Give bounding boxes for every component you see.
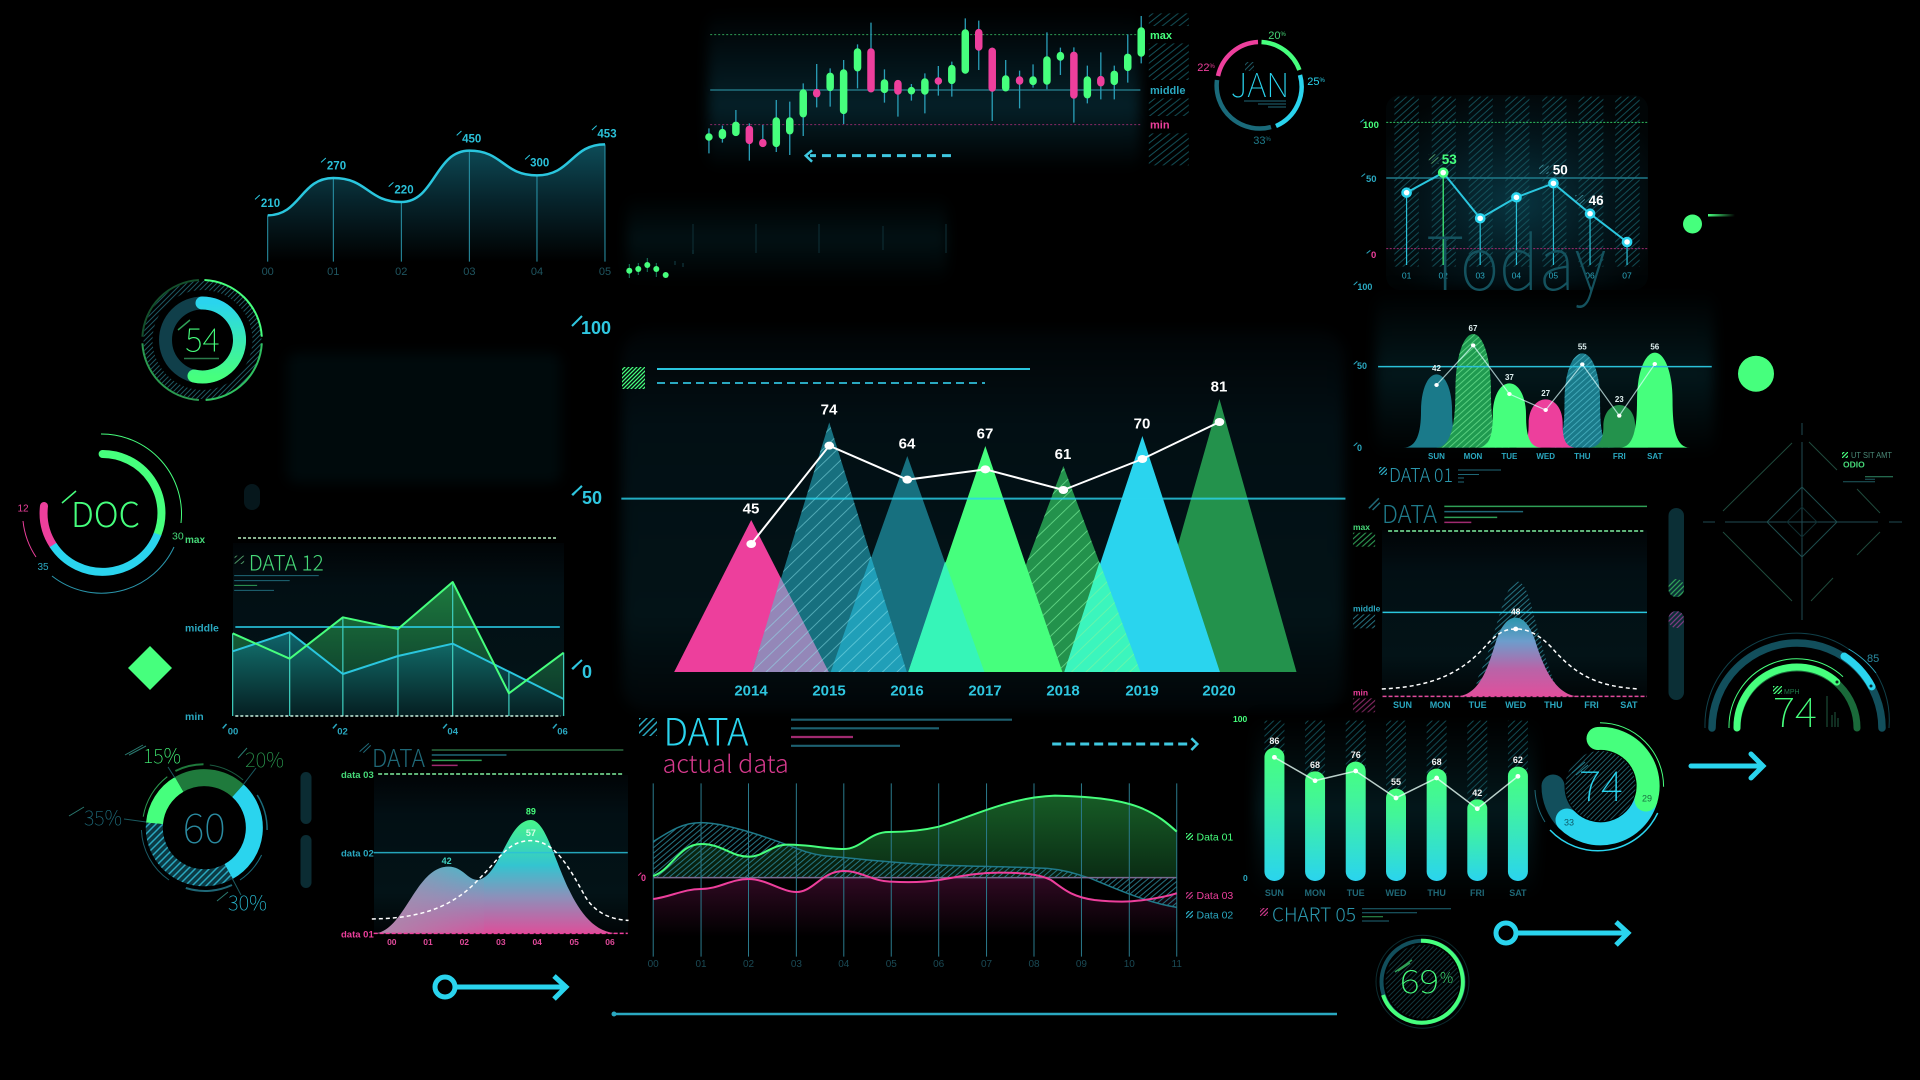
x axis labels: 04 (1512, 270, 1521, 280)
peak values (442, 806, 536, 866)
year labels: 2015 (812, 682, 846, 700)
x axis labels: 00 (648, 959, 659, 970)
value labels: 55 (1578, 342, 1587, 352)
faint panel behind left area (287, 353, 561, 483)
panel: big DATA multi-series chart (638, 702, 1233, 970)
x axis labels: 03 (496, 937, 506, 947)
x axis labels: 08 (1028, 959, 1040, 970)
value labels: 37 (1505, 373, 1514, 382)
day labels: SAT (1509, 888, 1527, 898)
x axis labels: 05 (886, 959, 897, 970)
panel: bar chart (1233, 714, 1536, 898)
legend (1186, 832, 1233, 922)
value labels: 70 (1134, 416, 1150, 432)
heading: DATA 01: DATA 01 (1389, 461, 1453, 488)
x axis labels: 03 (463, 266, 476, 278)
gauge value: 54 (185, 314, 220, 362)
radar caption: UT SIT AMT (1851, 450, 1892, 460)
peak values: 89 (526, 806, 536, 816)
y axis labels: 100 (1233, 714, 1247, 724)
year labels: 2016 (890, 682, 924, 700)
label: min: min (1150, 120, 1170, 132)
value labels: 42 (1472, 788, 1482, 798)
candlestick marks and guide lines (709, 13, 1189, 165)
panel: weekly humps chart (1354, 282, 1714, 461)
x axis labels: 04 (838, 959, 850, 970)
gauge value: 74 (1579, 753, 1623, 814)
gauge: JAN ring (1197, 30, 1325, 147)
data labels: 270 (327, 160, 346, 172)
x axis labels (387, 937, 615, 947)
value labels: 27 (1541, 389, 1551, 398)
year labels: 2020 (1202, 682, 1236, 700)
day labels: MON (1430, 700, 1451, 710)
value labels: 67 (977, 426, 993, 442)
side labels (341, 770, 374, 940)
heading: CHART 05: CHART 05 (1272, 901, 1356, 928)
panel: main triangle chart (572, 316, 1345, 712)
day labels: MON (1304, 888, 1326, 898)
side labels: data 02 (341, 848, 374, 860)
day labels: WED (1386, 888, 1407, 898)
y axis labels: 0 (1371, 250, 1376, 261)
gauge: 54 (142, 280, 262, 400)
data labels: 210 (261, 198, 280, 210)
day labels: TUE (1469, 700, 1487, 710)
heading DATA: DATA (664, 702, 749, 757)
ghost word: Today: Today (1426, 205, 1606, 312)
day labels: TUE (1347, 888, 1365, 898)
side labels (1353, 522, 1381, 698)
share 30%: 30% (228, 887, 267, 916)
day labels: SUN (1428, 452, 1445, 461)
subheading: actual data (663, 745, 789, 780)
gauge: 74 ring (1535, 723, 1664, 851)
x axis labels: 01 (1402, 270, 1412, 280)
legend: Data 01 (1196, 832, 1233, 844)
day labels: FRI (1470, 888, 1485, 898)
point values: 50 (1553, 162, 1568, 178)
radar caption (1842, 450, 1893, 482)
gauge: 69 percent (1376, 935, 1469, 1028)
value labels: 45 (743, 500, 759, 518)
plot (360, 743, 629, 933)
gauge: DOC (17, 434, 205, 593)
value 33%: % (1265, 137, 1271, 143)
y axis labels (1233, 714, 1248, 883)
side labels: max (1353, 522, 1370, 532)
day labels (1428, 452, 1663, 461)
x axis labels: 05 (1549, 270, 1558, 280)
year labels: 2017 (968, 682, 1002, 700)
day labels: SAT (1647, 452, 1663, 461)
data labels: 453 (597, 128, 617, 140)
chart title: DATA 12 (249, 548, 324, 578)
y axis labels: 100 (1357, 282, 1372, 292)
value labels: 86 (1269, 736, 1279, 746)
small pill (244, 484, 260, 510)
x axis labels: 02 (1438, 270, 1448, 280)
y axis labels: 0 (1243, 873, 1248, 883)
value labels (1432, 324, 1660, 404)
value labels: 81 (1211, 378, 1227, 396)
label min: min (185, 711, 204, 723)
donut: 60 (69, 740, 284, 916)
arrow: right (1691, 754, 1763, 778)
x axis labels: 06 (557, 726, 568, 738)
x axis labels: 07 (981, 959, 992, 970)
value 25%: % (1319, 78, 1325, 84)
y axis labels (1357, 282, 1372, 453)
day labels: FRI (1584, 700, 1599, 710)
x axis labels: 07 (1622, 270, 1632, 280)
data labels (261, 128, 617, 210)
y axis labels: 0 (582, 662, 592, 682)
icon: small green dot with dash (1683, 214, 1735, 234)
x axis labels: 03 (1475, 270, 1485, 280)
day labels: FRI (1613, 452, 1626, 461)
y axis labels: 50 (1357, 361, 1367, 371)
label: middle: middle (1150, 85, 1185, 97)
value labels: 67 (1469, 324, 1478, 333)
x axis labels: 02 (395, 266, 407, 278)
value 85: 85 (1867, 653, 1879, 665)
day labels: SUN (1393, 700, 1412, 710)
x axis labels: 04 (532, 937, 542, 947)
legend: Data 02 (1196, 910, 1233, 922)
x axis labels: 02 (743, 959, 754, 970)
arrow: circle to right, right (1496, 922, 1628, 945)
y axis labels: 100 (581, 318, 611, 338)
x axis labels (1402, 270, 1632, 280)
zero label: 0 (641, 873, 646, 883)
share 20%: 20% (245, 744, 284, 773)
value 30: 30 (172, 530, 184, 542)
value 33%: 33 (1253, 135, 1265, 147)
header lines and hatch (622, 367, 1030, 389)
value 22%: % (1209, 64, 1215, 70)
day labels: SUN (1265, 888, 1284, 898)
bottom timeline line (612, 1012, 1337, 1016)
value labels: 61 (1055, 446, 1071, 463)
day labels: WED (1536, 452, 1555, 461)
speed value: 74 (1773, 679, 1817, 739)
side labels: data 03 (341, 770, 374, 781)
radar caption: ODIO (1843, 460, 1865, 470)
y axis labels: 100 (1363, 120, 1379, 131)
x axis labels: 02 (460, 937, 469, 947)
chart series (223, 486, 582, 728)
panel: DATA 12 line chart (185, 486, 582, 738)
bars (1264, 721, 1528, 881)
chart title: DATA (372, 739, 425, 775)
value labels (1269, 736, 1523, 798)
side labels: min (1353, 688, 1368, 698)
plot (1360, 97, 1648, 267)
value labels: 42 (1432, 364, 1441, 373)
x axis labels: 09 (1076, 959, 1087, 970)
label max: max (185, 535, 205, 546)
plot (1353, 498, 1647, 712)
value labels: 56 (1650, 342, 1660, 352)
day labels (1393, 700, 1638, 710)
x axis labels: 01 (695, 959, 707, 970)
value labels: 64 (899, 436, 916, 452)
day labels: WED (1505, 700, 1527, 710)
value 25%: 25 (1307, 76, 1319, 88)
icon: green diamond (128, 646, 172, 690)
x axis labels: 00 (387, 937, 397, 947)
value 12: 12 (17, 504, 29, 514)
panel: mountain area chart (341, 739, 629, 947)
day labels: SAT (1620, 700, 1638, 710)
value labels: 74 (821, 402, 838, 418)
x axis labels: 02 (337, 726, 348, 738)
y axis labels: 0 (1357, 443, 1362, 453)
day labels: THU (1574, 452, 1591, 461)
share 35%: 35% (84, 802, 122, 831)
x axis labels: 05 (569, 937, 579, 947)
y axis labels: 50 (582, 488, 602, 508)
radar ghost diagram (1703, 423, 1902, 620)
label middle: middle (185, 622, 219, 634)
x axis labels: 00 (228, 726, 238, 738)
gauge title: DOC (71, 488, 140, 537)
panel: line chart with markers (1360, 95, 1648, 290)
day labels (1265, 888, 1527, 898)
value 20%: 20 (1268, 30, 1280, 42)
value labels: 68 (1432, 757, 1442, 767)
x axis labels: 11 (1172, 959, 1182, 970)
x axis labels: 01 (423, 937, 433, 947)
side labels: middle (1353, 604, 1381, 614)
icon: large green dot (1738, 356, 1774, 392)
panel: candlestick chart (708, 10, 1189, 170)
title hatch and lines (639, 718, 1012, 746)
peak value: 48 (1511, 606, 1521, 616)
x axis labels (262, 266, 611, 278)
year labels: 2018 (1046, 682, 1080, 700)
day labels: TUE (1501, 452, 1518, 461)
peak values: 57 (526, 828, 536, 838)
side pills right (1668, 508, 1684, 700)
value labels: 23 (1615, 395, 1624, 404)
x axis labels: 01 (327, 266, 339, 278)
x axis labels: 00 (262, 266, 274, 278)
value labels: 55 (1391, 777, 1401, 787)
ghost panel with ticks (626, 195, 947, 283)
y axis labels: 50 (1366, 174, 1377, 185)
x axis labels: 03 (791, 959, 802, 970)
x axis labels: 06 (933, 959, 945, 970)
triangles (621, 399, 1345, 672)
data labels: 450 (462, 134, 481, 146)
label: max: max (1150, 30, 1173, 42)
x axis labels: 06 (1585, 270, 1595, 280)
point values: 53 (1442, 152, 1457, 167)
value 33: 33 (1564, 818, 1574, 828)
point values (1442, 152, 1604, 208)
curve and drop lines (255, 126, 605, 262)
gauge value: 69 (1400, 957, 1439, 1003)
side pills left (300, 772, 312, 888)
gauge: speed 74 (1705, 633, 1889, 739)
value labels: 68 (1310, 760, 1320, 770)
value 22%: 22 (1197, 62, 1209, 74)
value 29: 29 (1642, 794, 1652, 804)
heading: DATA 01 (1379, 461, 1501, 488)
x axis labels: 05 (599, 266, 611, 278)
arrow: circle to right, left (435, 976, 566, 999)
share 15%: 15% (143, 740, 181, 769)
heading: CHART 05 (1260, 901, 1451, 928)
y axis labels (1363, 120, 1379, 261)
day labels: THU (1427, 888, 1446, 898)
data labels: 220 (394, 184, 414, 196)
donut value: 60 (183, 795, 226, 855)
x axis labels (648, 959, 1182, 970)
plot (638, 738, 1197, 957)
x axis labels: 04 (531, 266, 543, 278)
value labels (743, 378, 1227, 518)
day labels: MON (1464, 452, 1483, 461)
humps (1354, 282, 1712, 448)
x axis labels (228, 726, 568, 738)
year labels (734, 682, 1236, 700)
data labels: 300 (530, 158, 549, 170)
unit: MPH (1784, 689, 1800, 696)
panel: bell curve chart (1353, 495, 1647, 712)
value 20%: % (1280, 32, 1286, 38)
area chart: top left (255, 126, 617, 278)
x axis labels: 06 (605, 937, 615, 947)
chart title: DATA (1382, 495, 1437, 531)
y axis labels (572, 316, 611, 682)
percent sign: % (1440, 967, 1453, 988)
peak values: 42 (442, 856, 452, 866)
point values: 46 (1589, 193, 1604, 208)
side labels: data 01 (341, 930, 374, 940)
x axis labels: 10 (1124, 959, 1135, 970)
x axis labels: 04 (447, 726, 459, 738)
year labels: 2014 (734, 682, 768, 700)
value 35: 35 (37, 562, 49, 573)
value labels: 76 (1351, 750, 1361, 760)
day labels: THU (1544, 700, 1563, 710)
legend: Data 03 (1196, 890, 1233, 902)
value labels: 62 (1513, 755, 1523, 765)
gauge title: JAN (1231, 59, 1289, 107)
year labels: 2019 (1125, 682, 1159, 700)
